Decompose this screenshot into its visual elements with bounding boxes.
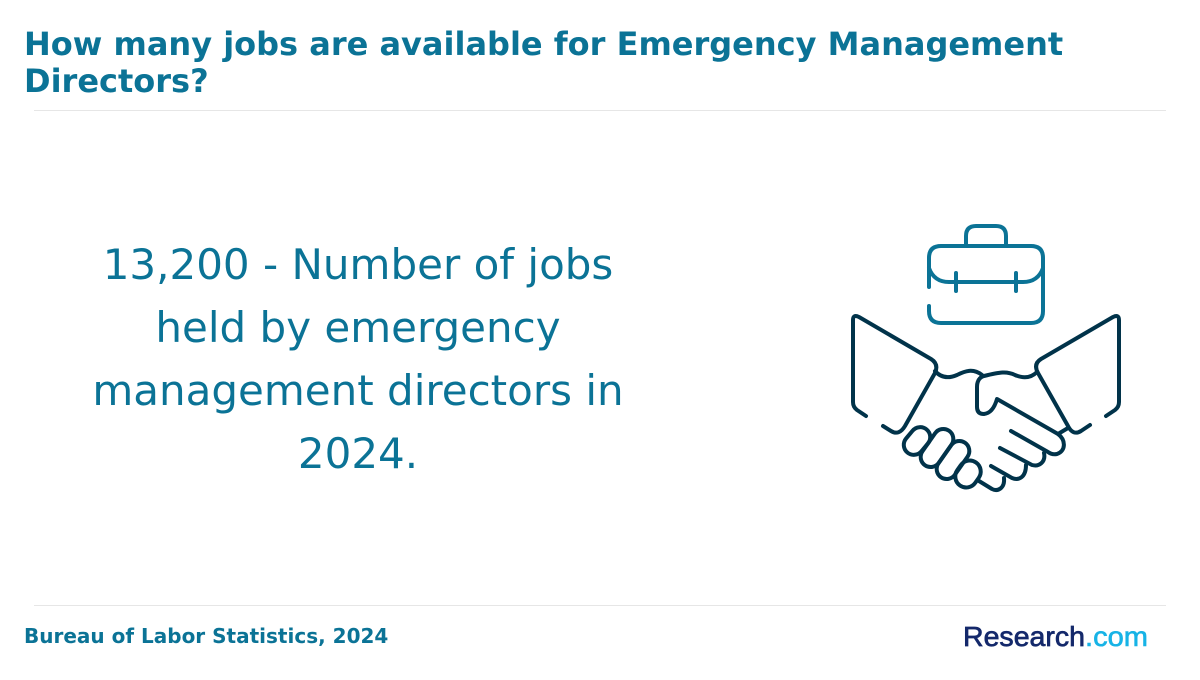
logo: .com bbox=[1085, 621, 1148, 652]
icon: briefcase over handshake bbox=[851, 224, 1121, 492]
source: Bureau of Labor Statistics, 2024 bbox=[24, 624, 388, 648]
logo bbox=[963, 621, 1148, 652]
title: How many jobs are available for Emergency Management Directors? bbox=[24, 25, 1063, 100]
icon: handshake bbox=[853, 316, 1119, 492]
logo: Research bbox=[963, 621, 1085, 652]
icon: briefcase bbox=[929, 226, 1043, 323]
main statistic text: 13,200 - Number of jobs held by emergency management directors in 2024. bbox=[92, 240, 624, 478]
